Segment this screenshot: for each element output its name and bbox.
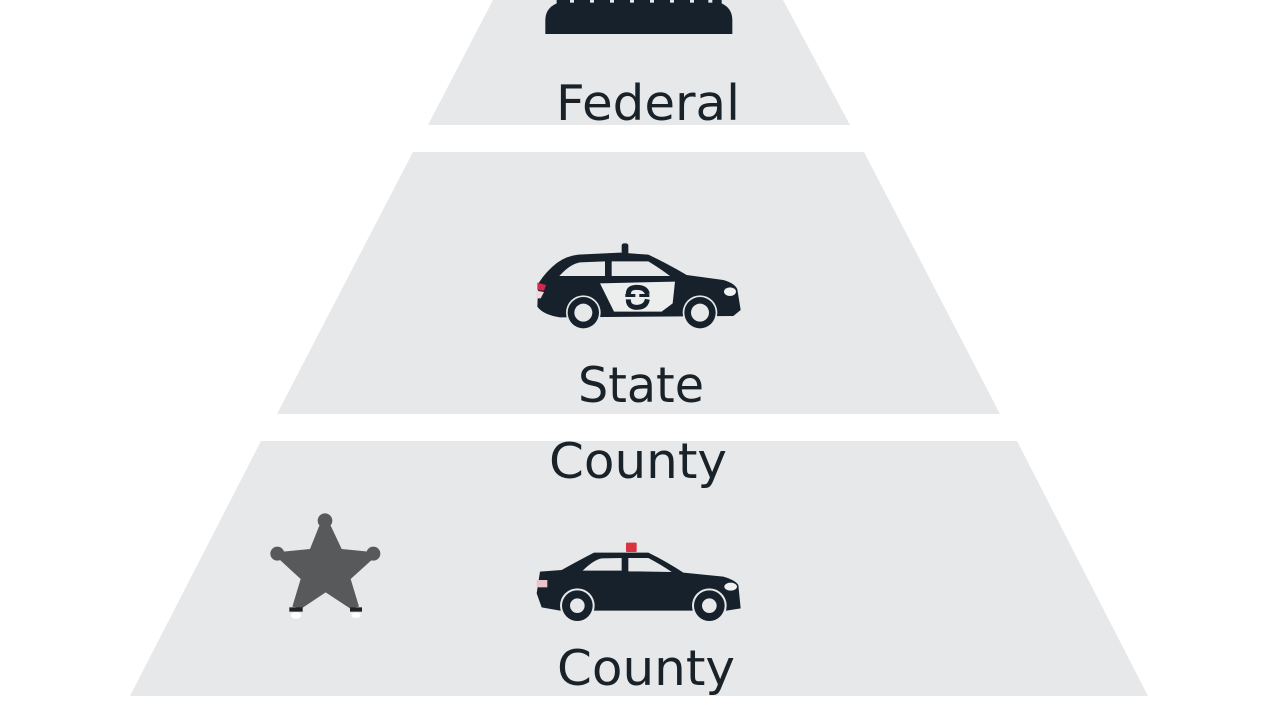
panel: county tier	[130, 433, 1148, 697]
label: Federal: Federal	[556, 75, 740, 132]
icon: county patrol car	[537, 543, 741, 623]
label: State: State	[578, 357, 704, 414]
label: County upper: County	[549, 433, 727, 490]
label: County lower: County	[557, 640, 735, 697]
panel: federal tier	[428, 0, 850, 132]
icon: sheriff star badge	[270, 513, 380, 619]
panel: state tier	[277, 152, 1000, 414]
door emblem	[628, 287, 647, 307]
icon: state police car	[536, 243, 741, 330]
icon: federal building base	[545, 0, 732, 34]
